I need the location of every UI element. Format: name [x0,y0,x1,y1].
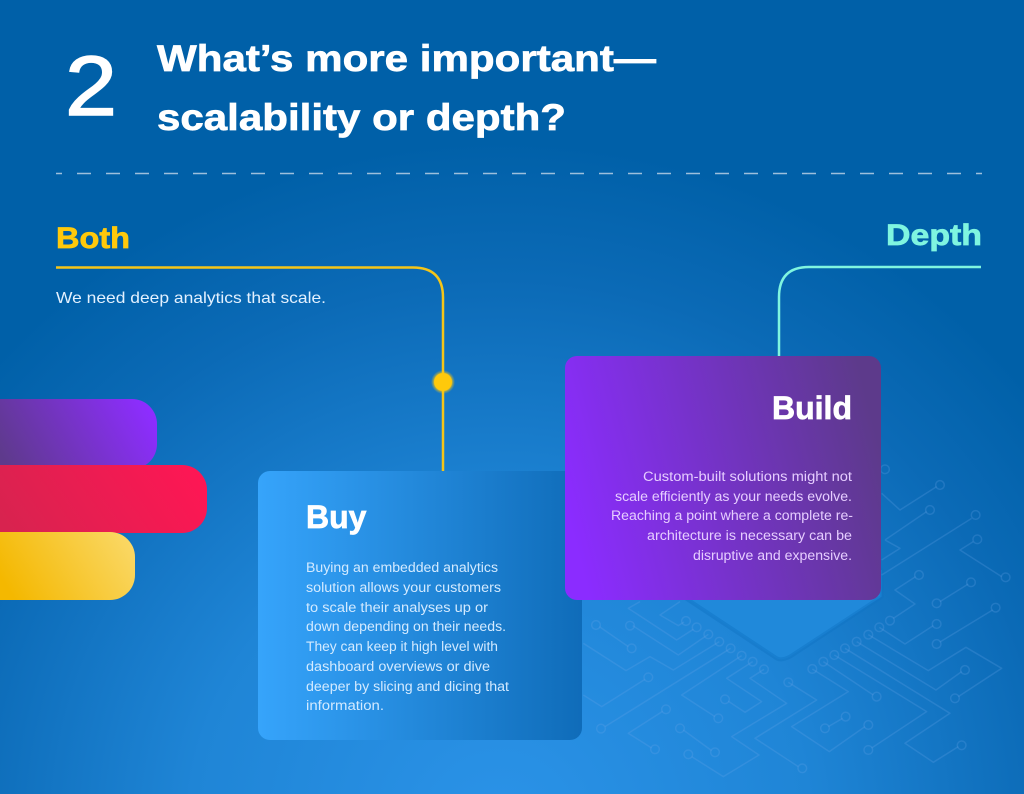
Buy body text: dashboard overviews or dive [306,659,490,674]
Buy heading: Buy [306,499,367,535]
panel: Build [565,356,881,600]
Buy body text: deeper by slicing and dicing that [306,679,509,694]
connector: Depth to Build [779,267,981,356]
Build body text: architecture is necessary can be [647,528,852,543]
yellow bar [0,532,135,600]
Build body text: Custom-built solutions might not [643,469,852,484]
connector dot [431,370,455,394]
Buy body text: to scale their analyses up or [306,600,489,615]
text: both statement: We need deep analytics that scale. [56,290,326,307]
Buy body text [306,560,509,713]
Build heading: Build [772,390,852,426]
panel: Buy [258,471,582,740]
title: What’s more important— [157,38,656,79]
title [157,38,656,138]
Buy body text: information. [306,698,384,713]
connector: Both to Buy [56,268,443,471]
section number: 2 [65,39,117,133]
purple bar [0,399,157,469]
circuit board illustration [583,465,1010,777]
Buy body text: solution allows your customers [306,580,501,595]
label: Both: Both [56,222,130,255]
title: scalability or depth? [157,97,566,138]
label: Depth: Depth [886,219,982,252]
Build body text: Reaching a point where a complete re- [611,508,853,523]
Build body text: disruptive and expensive. [693,548,852,563]
Buy body text: down depending on their needs. [306,619,506,634]
decorative stacked bars [0,399,207,600]
Build body text [611,469,853,563]
red bar [0,465,207,533]
Buy body text: Buying an embedded analytics [306,560,498,575]
Build body text: scale efficiently as your needs evolve. [615,489,852,504]
Buy body text: They can keep it high level with [306,639,498,654]
